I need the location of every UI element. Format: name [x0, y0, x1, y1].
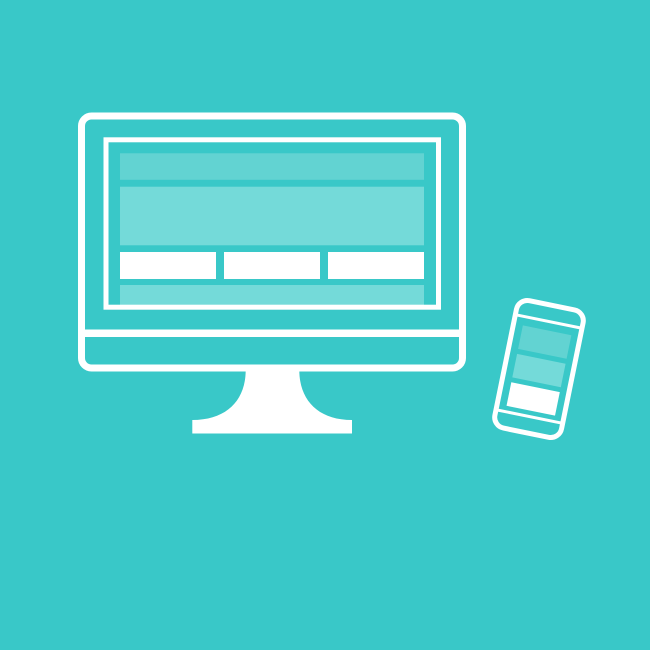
monitor frame	[82, 116, 462, 368]
screen header bar	[120, 153, 424, 180]
screen border	[106, 140, 438, 307]
icon: desktop monitor	[82, 116, 462, 434]
screen button middle	[224, 252, 320, 279]
screen button left	[120, 252, 216, 279]
screen button right	[328, 252, 424, 279]
monitor chin divider	[82, 330, 462, 337]
phone panel middle	[512, 354, 566, 387]
phone panel bottom	[507, 382, 560, 416]
phone panel top	[518, 325, 571, 359]
monitor stand	[192, 370, 352, 434]
screen footer bar	[120, 285, 424, 305]
phone bottom divider	[496, 408, 563, 425]
screen hero panel	[120, 187, 424, 245]
phone body	[493, 299, 585, 439]
icon: smartphone	[493, 299, 585, 439]
phone top divider	[515, 313, 582, 330]
